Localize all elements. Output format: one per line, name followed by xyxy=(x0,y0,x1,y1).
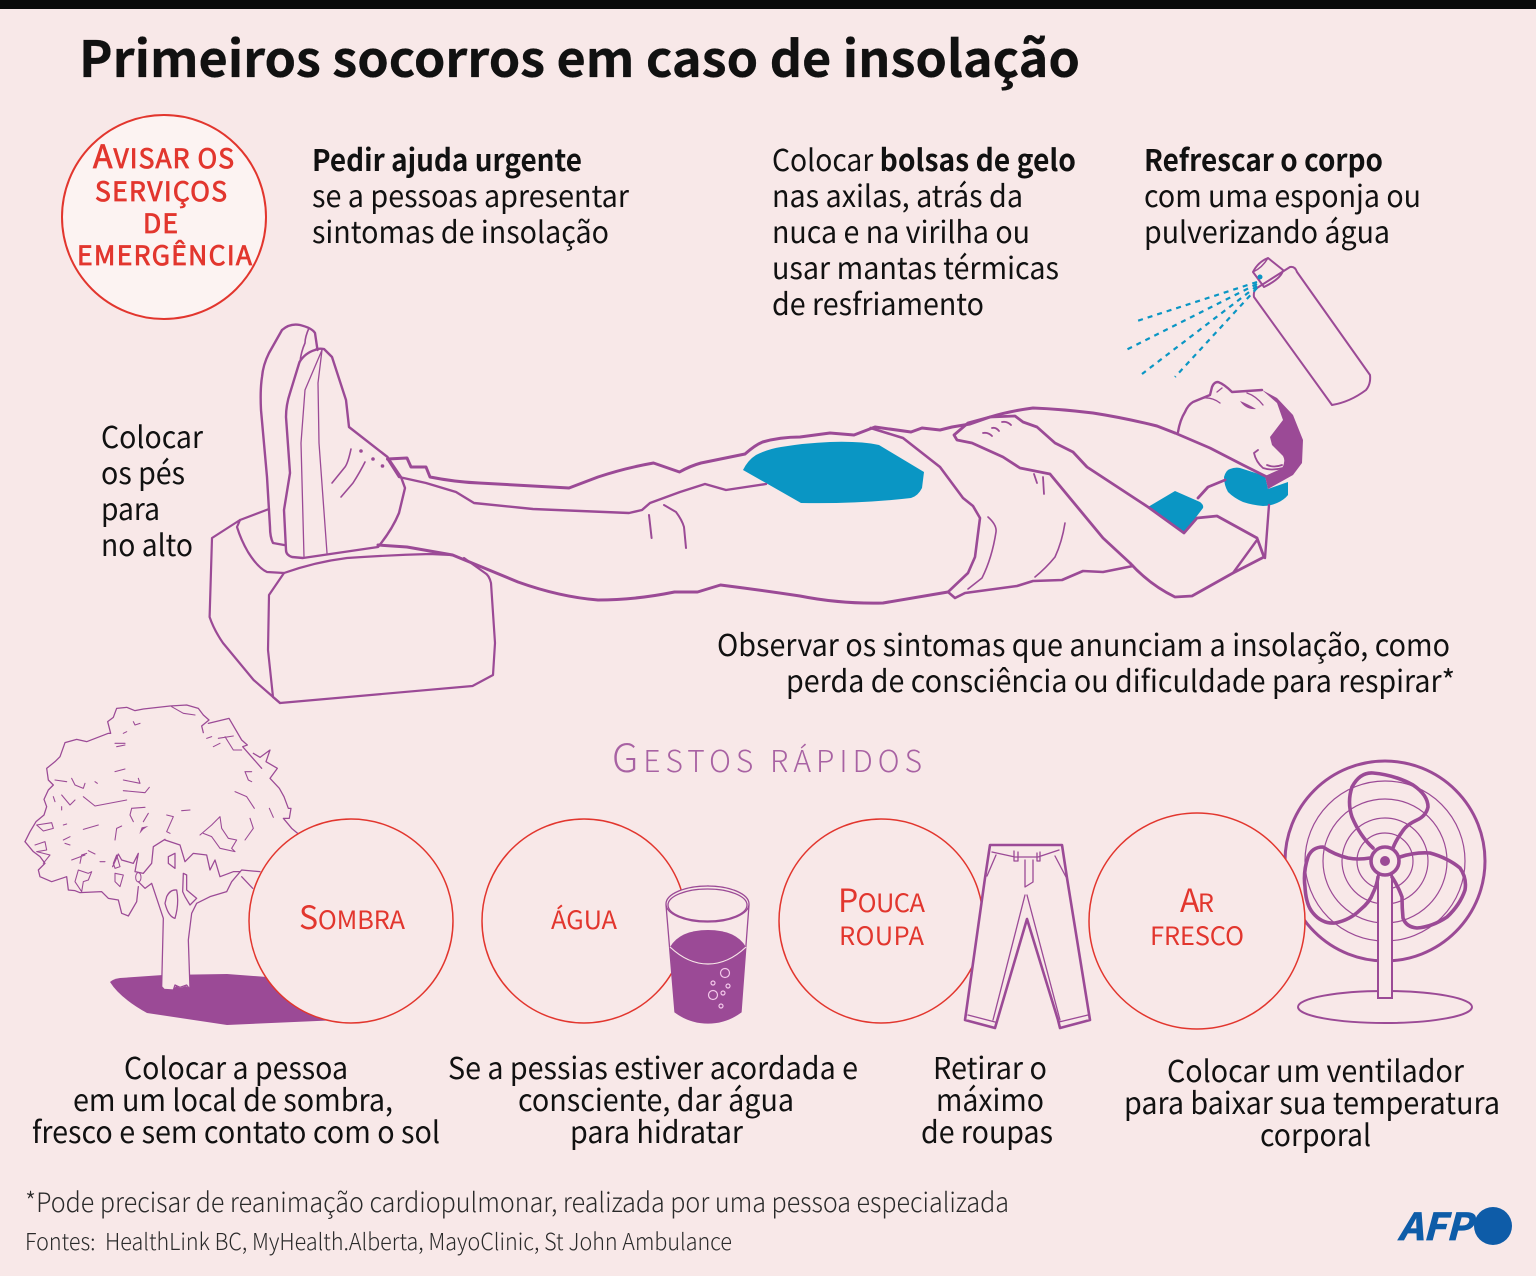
text: bolsas de gelo: usar mantas térmicas xyxy=(772,244,1059,288)
panel: pouca roupa circle xyxy=(779,819,983,1023)
text: retirar roupas: máximo xyxy=(936,1076,1044,1120)
text: ventilador: corporal xyxy=(1260,1111,1371,1155)
waist xyxy=(871,428,1133,598)
back foot xyxy=(261,325,318,545)
text: colocar a pessoa: fresco e sem contato com o sol xyxy=(32,1108,440,1152)
icon: tree with shadow xyxy=(25,705,340,1025)
icon: cold pack on neck xyxy=(1224,468,1288,506)
icon: cold pack on groin xyxy=(743,442,924,503)
icon: person lying with feet raised xyxy=(261,325,1303,603)
panel: ar fresco circle: FRESCO xyxy=(1150,916,1244,953)
text: refrescar o corpo: Refrescar o corpo xyxy=(1144,136,1383,180)
callout: avisar os serviços de emergência: SERVIÇOS xyxy=(95,170,227,209)
icon: electric fan xyxy=(1285,761,1485,1023)
text: dar água xyxy=(448,1044,858,1152)
text: observar os sintomas: Observar os sintomas que anunciam a insolação, como xyxy=(717,621,1450,665)
panel: sombra circle: SOMBRA xyxy=(299,893,405,939)
title: Primeiros socorros em caso de insolação xyxy=(79,20,1080,92)
text: colocar os pés para no alto: os pés xyxy=(101,449,185,493)
text: ventilador: para baixar sua temperatura xyxy=(1124,1079,1500,1123)
callout: avisar os serviços de emergência: AVISAR OS xyxy=(93,132,234,178)
callout: avisar os serviços de emergência xyxy=(62,115,266,319)
text: colocar os pés para no alto: no alto xyxy=(101,521,193,565)
panel: ar fresco circle xyxy=(1089,813,1305,1029)
front foot xyxy=(284,349,405,558)
text: colocar os pés para no alto: Colocar xyxy=(101,413,203,457)
text: colocar os pés para no alto: para xyxy=(101,485,160,529)
sources: Fontes: HealthLink BC, MyHealth.Alberta, MayoClinic, St John Ambulance xyxy=(25,1223,732,1257)
heading: gestos rápidos: GESTOS RÁPIDOS xyxy=(612,728,922,784)
text: refrescar o corpo: pulverizando água xyxy=(1144,208,1390,252)
icon: cold pack on armpit xyxy=(1148,491,1203,533)
text: pedir ajuda urgente xyxy=(312,136,629,252)
leg upper lines xyxy=(388,408,1175,488)
text: pedir ajuda urgente: se a pessoas apresentar xyxy=(312,172,629,216)
logo: AFP xyxy=(1397,1197,1512,1251)
text: refrescar o corpo: com uma esponja ou xyxy=(1144,172,1421,216)
text: ventilador xyxy=(1124,1047,1500,1155)
logo: AFP: AFP xyxy=(1397,1197,1478,1251)
text: retirar roupas xyxy=(921,1044,1053,1152)
callout: avisar os serviços de emergência: EMERGÊNCIA xyxy=(77,234,252,273)
text: bolsas de gelo xyxy=(772,136,1076,324)
icon: trousers xyxy=(965,845,1090,1028)
text: bolsas de gelo: nas axilas, atrás da xyxy=(772,172,1023,216)
head xyxy=(1178,382,1262,432)
panel: pouca roupa circle: POUCA xyxy=(838,876,925,922)
panel: água circle xyxy=(482,819,686,1023)
text: retirar roupas: Retirar o xyxy=(933,1044,1047,1088)
panel: pouca roupa circle: ROUPA xyxy=(839,916,924,953)
text: colocar a pessoa: em um local de sombra, xyxy=(73,1076,393,1120)
text: bolsas de gelo: nuca e na virilha ou xyxy=(772,208,1030,252)
panel: água circle: ÁGUA xyxy=(551,900,617,937)
text: bolsas de gelo: de resfriamento xyxy=(772,280,984,324)
text: retirar roupas: de roupas xyxy=(921,1108,1053,1152)
shoulder and neck xyxy=(1175,433,1267,498)
text: refrescar o corpo xyxy=(1144,136,1421,252)
icon: spray bottle xyxy=(1126,258,1370,405)
text: colocar a pessoa xyxy=(32,1044,440,1152)
leg lower line xyxy=(378,545,948,603)
footnote: *Pode precisar de reanimação cardiopulmonar, realizada por uma pessoa especializada xyxy=(25,1181,1009,1220)
icon: elevation cushion xyxy=(210,509,495,703)
icon: glass of water xyxy=(666,886,749,1023)
callout: avisar os serviços de emergência: DE xyxy=(143,202,178,241)
text: observar os sintomas: perda de consciência ou dificuldade para respirar* xyxy=(786,657,1455,701)
text: observar os sintomas xyxy=(717,621,1455,701)
panel: ar fresco circle: AR xyxy=(1180,876,1214,922)
text: dar água: para hidratar xyxy=(570,1108,743,1152)
text: bolsas de gelo: Colocar bolsas de gelo xyxy=(772,136,1076,180)
text: dar água: Se a pessias estiver acordada e xyxy=(448,1044,858,1088)
text: pedir ajuda urgente: Pedir ajuda urgente xyxy=(312,136,582,180)
text: ventilador: Colocar um ventilador xyxy=(1167,1047,1464,1091)
panel: sombra circle xyxy=(249,819,453,1023)
text: colocar os pés para no alto xyxy=(101,413,203,565)
text: colocar a pessoa: Colocar a pessoa xyxy=(124,1044,348,1088)
text: dar água: consciente, dar água xyxy=(518,1076,794,1120)
arm and hand xyxy=(954,416,1264,597)
text: pedir ajuda urgente: sintomas de insolação xyxy=(312,208,609,252)
